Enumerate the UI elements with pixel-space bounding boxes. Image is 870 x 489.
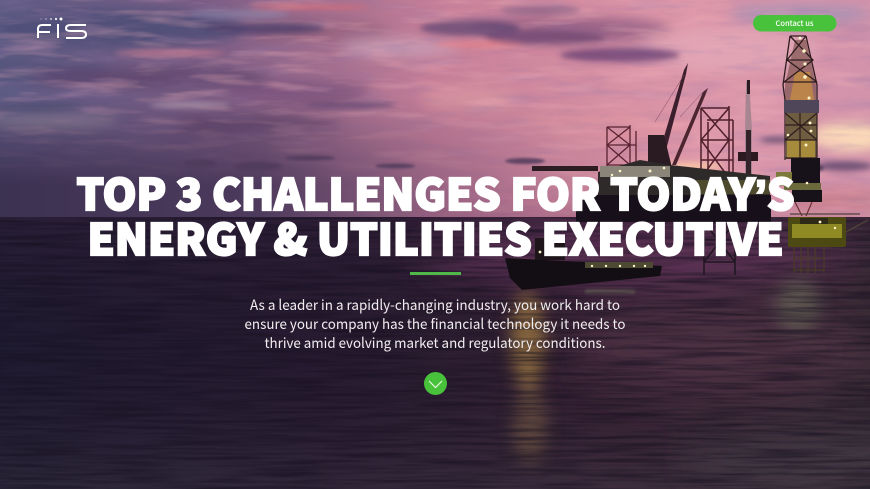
- rig: submerged lattice legs: [704, 222, 735, 275]
- background: sunset sky: [0, 0, 870, 220]
- rig: lights: [539, 37, 836, 267]
- rig: central lattice tower: [701, 106, 733, 178]
- intro paragraph: ensure your company has the financial technology it needs to: [244, 314, 626, 334]
- title: ENERGY & UTILITIES EXECUTIVE: [88, 206, 783, 268]
- title: [77, 161, 794, 268]
- intro paragraph: thrive amid evolving market and regulatory conditions.: [264, 333, 606, 353]
- logo letters: [38, 24, 86, 38]
- rig: yellow lower platform: [788, 214, 868, 273]
- background: dark sea: [0, 217, 870, 489]
- rig: main derrick: [776, 36, 822, 216]
- logo: FIS: [38, 18, 86, 38]
- intro paragraph: [244, 295, 626, 353]
- green divider: [410, 272, 461, 275]
- rig: left lattice tower: [607, 125, 636, 166]
- icon: scroll down chevron: [424, 372, 447, 395]
- offshore oil rig: [505, 36, 868, 290]
- rig: cranes: [648, 63, 708, 168]
- logo dots: [40, 18, 62, 20]
- rig: drilling mast: [738, 80, 758, 178]
- rig: hull and deck: [532, 160, 771, 222]
- button: contact us: [753, 15, 836, 32]
- button: contact us: Contact us: [776, 18, 814, 29]
- rig: supply ship: [505, 238, 662, 290]
- intro paragraph: As a leader in a rapidly-changing industry, you work hard to: [250, 295, 620, 315]
- title: TOP 3 CHALLENGES FOR TODAY’S: [77, 161, 794, 223]
